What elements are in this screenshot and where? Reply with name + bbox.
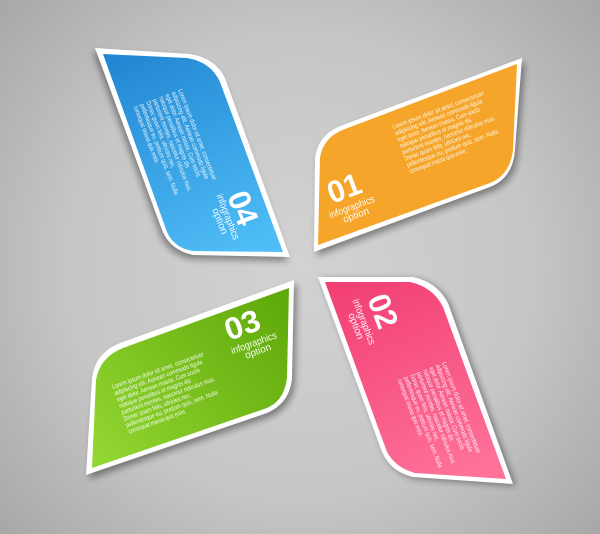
panel: 03 green	[86, 280, 297, 479]
body text: parturient montes, nascetur ridiculus mus.	[401, 115, 497, 156]
label: infographics option: infographics	[214, 193, 241, 241]
label: infographics option: infographics	[350, 298, 377, 346]
body text: natoque penatibus et magnis dis	[157, 96, 191, 170]
panel: 04 blue	[93, 48, 290, 261]
body text: Donec quam felis, ultricies nec,	[408, 373, 440, 442]
number 04: 04	[220, 186, 266, 231]
body text: eget dolor. Aenean massa. Cum sociis	[397, 106, 482, 144]
body text: parturient montes, nascetur ridiculus mus.	[121, 376, 216, 416]
body text: pellentesque eu, pretium quis, sem. Nulla	[402, 376, 443, 469]
label: infographics option: option	[209, 207, 229, 236]
panel: 02 pink	[318, 277, 516, 486]
body text: pellentesque eu, pretium quis, sem. Nulla	[125, 389, 219, 429]
body text: natoque penatibus et magnis dis	[118, 377, 193, 410]
body text	[132, 88, 218, 200]
body text: Lorem ipsum dolor sit amet, consectetuer	[392, 90, 486, 131]
label: infographics option: infographics	[328, 194, 377, 221]
body text: parturient montes, nascetur ridiculus mus.	[151, 98, 193, 193]
body text: pellentesque eu, pretium quis, sem. Nulla	[406, 128, 500, 169]
body text: eget dolor. Aenean massa. Cum sociis	[427, 366, 466, 451]
body text	[111, 350, 223, 436]
panel: 01 orange	[314, 58, 525, 256]
body text: natoque penatibus et magnis dis	[399, 117, 473, 150]
label: infographics option	[328, 194, 380, 230]
body text: Lorem ipsum dolor sit amet, consectetuer	[111, 351, 205, 391]
label: infographics option: infographics	[230, 330, 279, 357]
number 03: 03	[219, 302, 265, 348]
label: infographics option	[341, 298, 377, 350]
body text: Lorem ipsum dolor sit amet, consectetuer	[176, 88, 218, 182]
number 02: 02	[360, 289, 405, 333]
body text: pellentesque eu, pretium quis, sem. Nulla	[138, 103, 179, 196]
body text: consequat massa quis enim.	[128, 408, 187, 436]
label: infographics option	[230, 330, 282, 365]
body text: eget dolor. Aenean massa. Cum sociis	[116, 367, 202, 404]
label: infographics option	[205, 193, 241, 245]
body text: consequat massa quis enim.	[396, 378, 424, 438]
body text	[392, 90, 504, 175]
body text: Donec quam felis, ultricies nec,	[123, 392, 192, 423]
body text: Donec quam felis, ultricies nec,	[404, 131, 473, 163]
number 01: 01	[322, 166, 366, 211]
body text: eget dolor. Aenean massa. Cum sociis	[163, 93, 202, 178]
label: infographics option: option	[243, 342, 273, 362]
body text: adipiscing elit. Aenean commodo ligula	[114, 359, 204, 397]
body text: parturient montes, nascetur ridiculus mus.	[415, 371, 457, 466]
body text: natoque penatibus et magnis dis	[421, 369, 455, 443]
body text: consequat massa quis enim.	[132, 105, 160, 165]
body text: Lorem ipsum dolor sit amet, consectetuer	[440, 361, 482, 455]
body text: adipiscing elit. Aenean commodo ligula	[434, 364, 474, 453]
body text	[396, 361, 482, 473]
body text: consequat massa quis enim.	[408, 147, 468, 175]
body text: adipiscing elit. Aenean commodo ligula	[394, 98, 484, 137]
label: infographics option: option	[345, 312, 365, 341]
body text: Donec quam felis, ultricies nec,	[144, 100, 176, 169]
label: infographics option: option	[342, 206, 371, 226]
body text: adipiscing elit. Aenean commodo ligula	[170, 91, 210, 180]
